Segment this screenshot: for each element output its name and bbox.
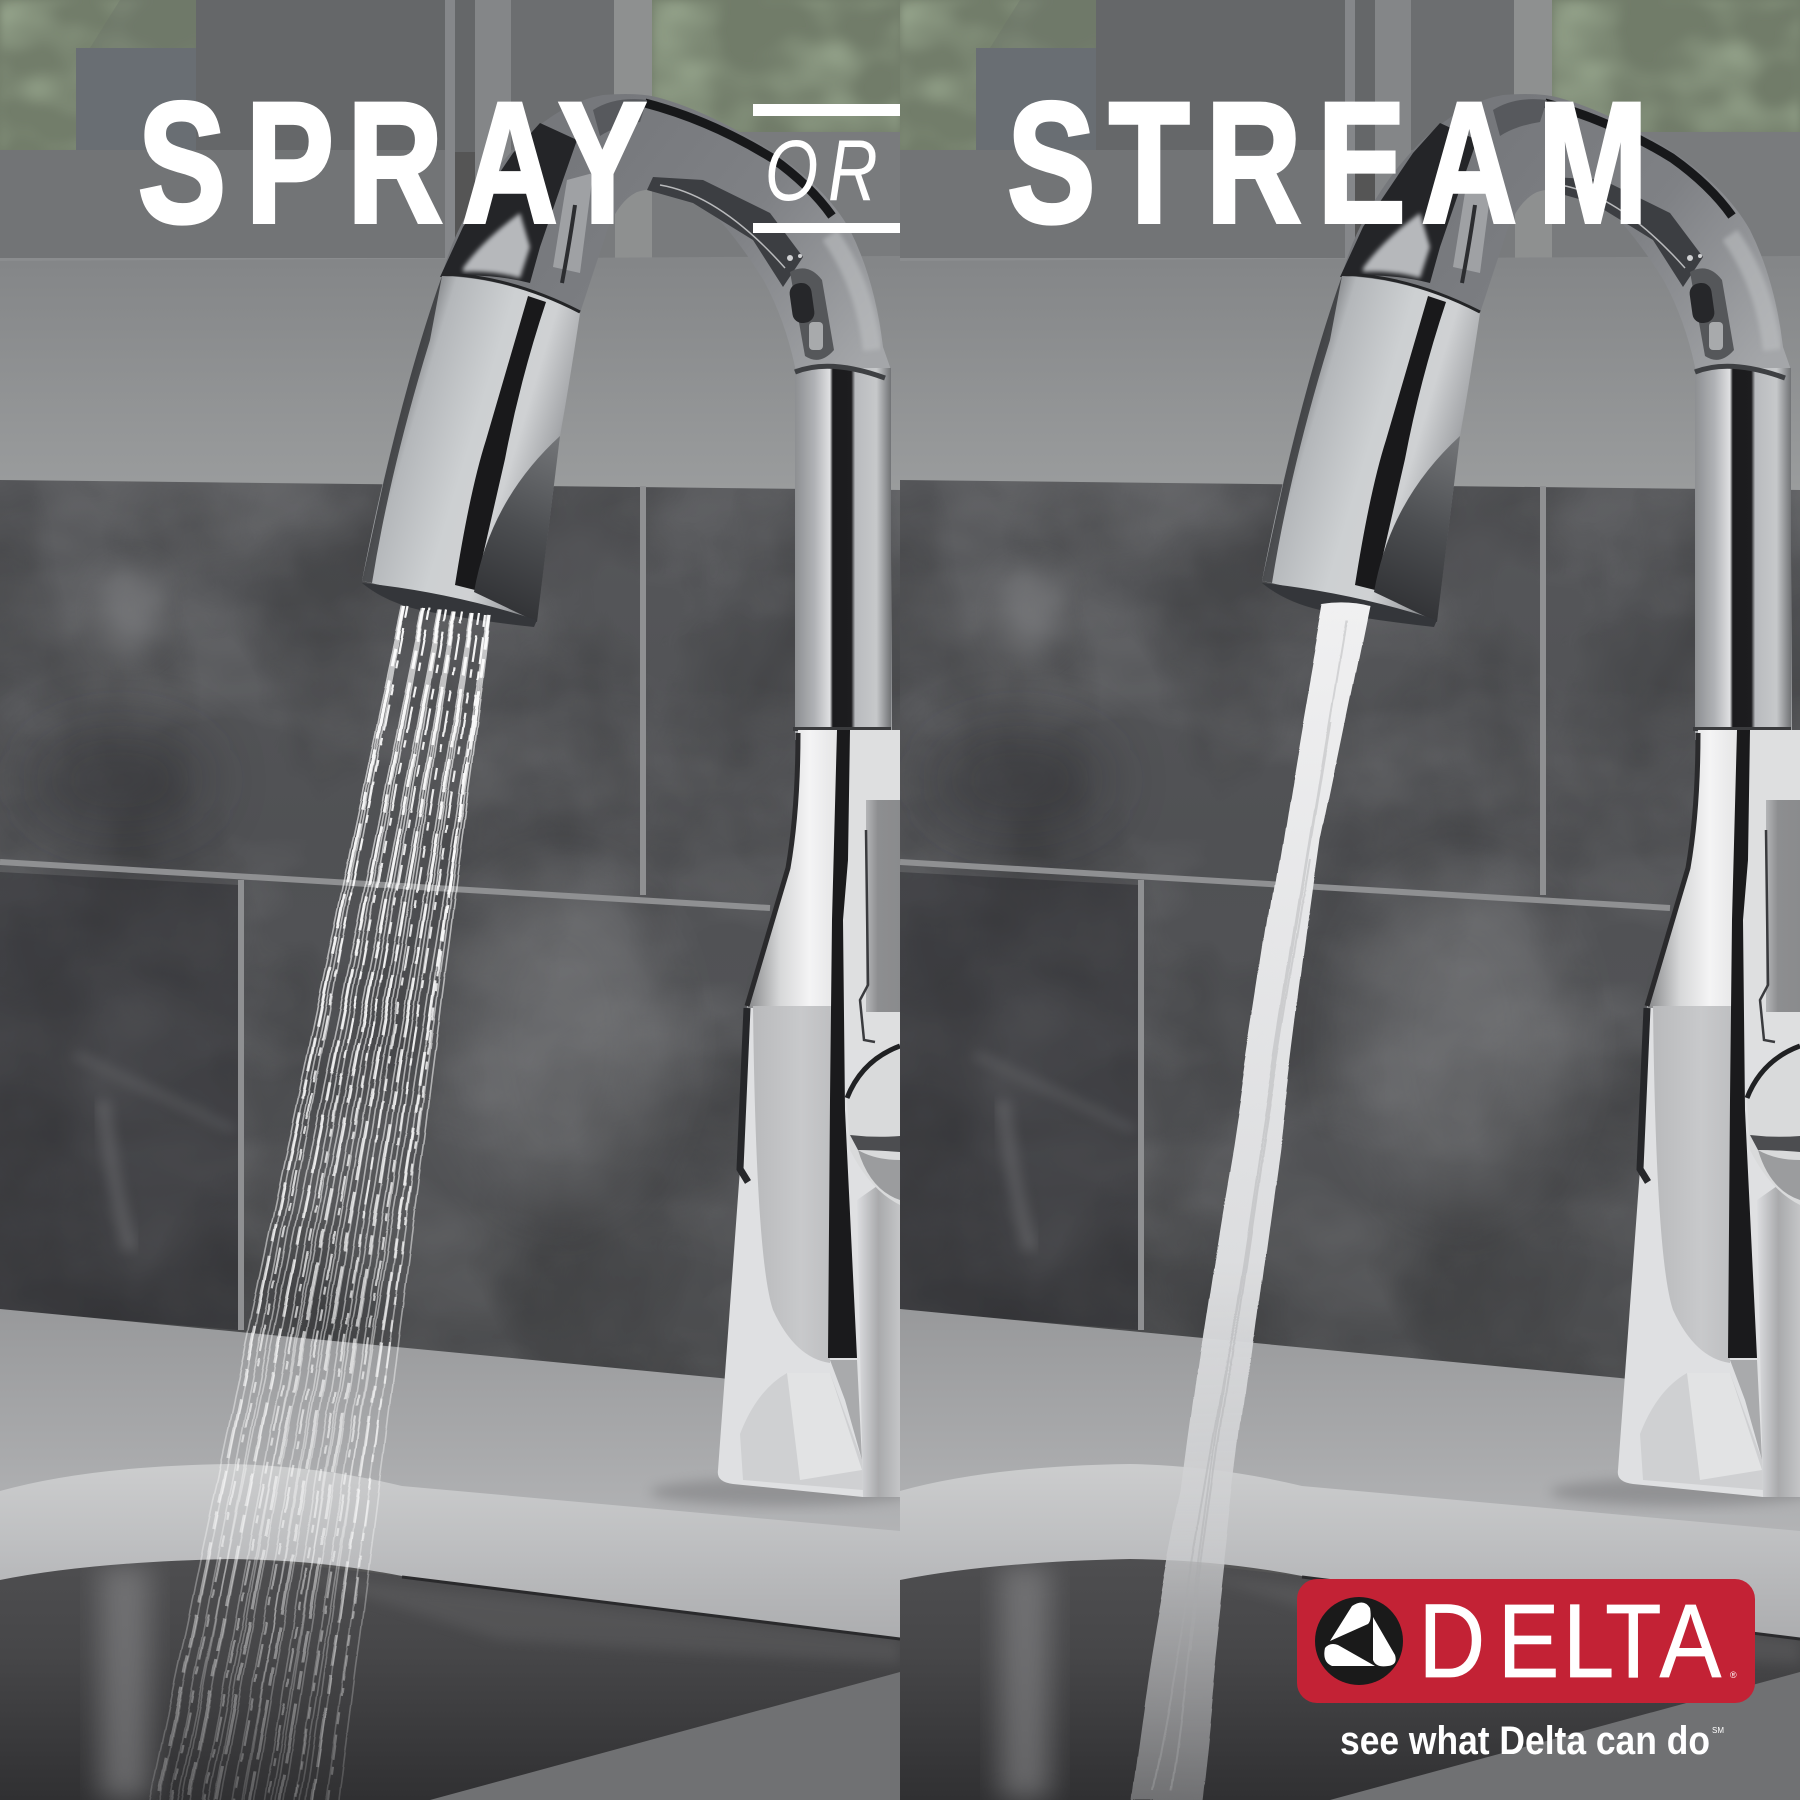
title: spray: SPRAY <box>138 66 647 259</box>
tagline: see what Delta can do <box>1340 1719 1710 1763</box>
logo wordmark: DELTA <box>1419 1581 1721 1699</box>
sink basin <box>0 1558 900 1800</box>
registered mark: ® <box>1730 1670 1737 1680</box>
right panel: repeat of the photo scene <box>900 0 1800 1800</box>
black body reflection <box>828 730 857 1358</box>
wall band <box>0 256 900 492</box>
or divider: OR <box>765 123 878 219</box>
Delta logo <box>1297 1579 1755 1703</box>
droplet strands <box>158 606 490 1800</box>
icon: delta emblem <box>1315 1597 1403 1685</box>
countertop front edge <box>0 1464 900 1638</box>
spray water jets <box>150 605 491 1800</box>
arch reflections <box>440 99 872 350</box>
tagline: SM <box>1712 1726 1724 1735</box>
faucet handle <box>847 830 900 1205</box>
photo scene: left panel kitchen backdrop and faucet <box>0 0 910 1800</box>
stream water column <box>1131 602 1368 1800</box>
faucet lower body <box>718 730 900 1497</box>
window frame band <box>0 0 900 262</box>
faucet control detail <box>787 254 834 360</box>
backsplash tiles <box>0 480 900 1400</box>
faucet <box>362 94 900 1497</box>
or divider <box>753 104 900 233</box>
faucet arch <box>442 94 892 740</box>
faucet spray head <box>362 274 580 627</box>
solid strands <box>150 605 491 1800</box>
grout lines <box>0 486 770 1330</box>
faucet stem <box>795 368 891 731</box>
logo red badge <box>1297 1579 1755 1703</box>
spray head nozzle face <box>362 583 537 627</box>
faucet base reflection <box>740 1373 863 1490</box>
countertop <box>0 1309 910 1540</box>
title: stream: STREAM <box>1007 66 1648 259</box>
